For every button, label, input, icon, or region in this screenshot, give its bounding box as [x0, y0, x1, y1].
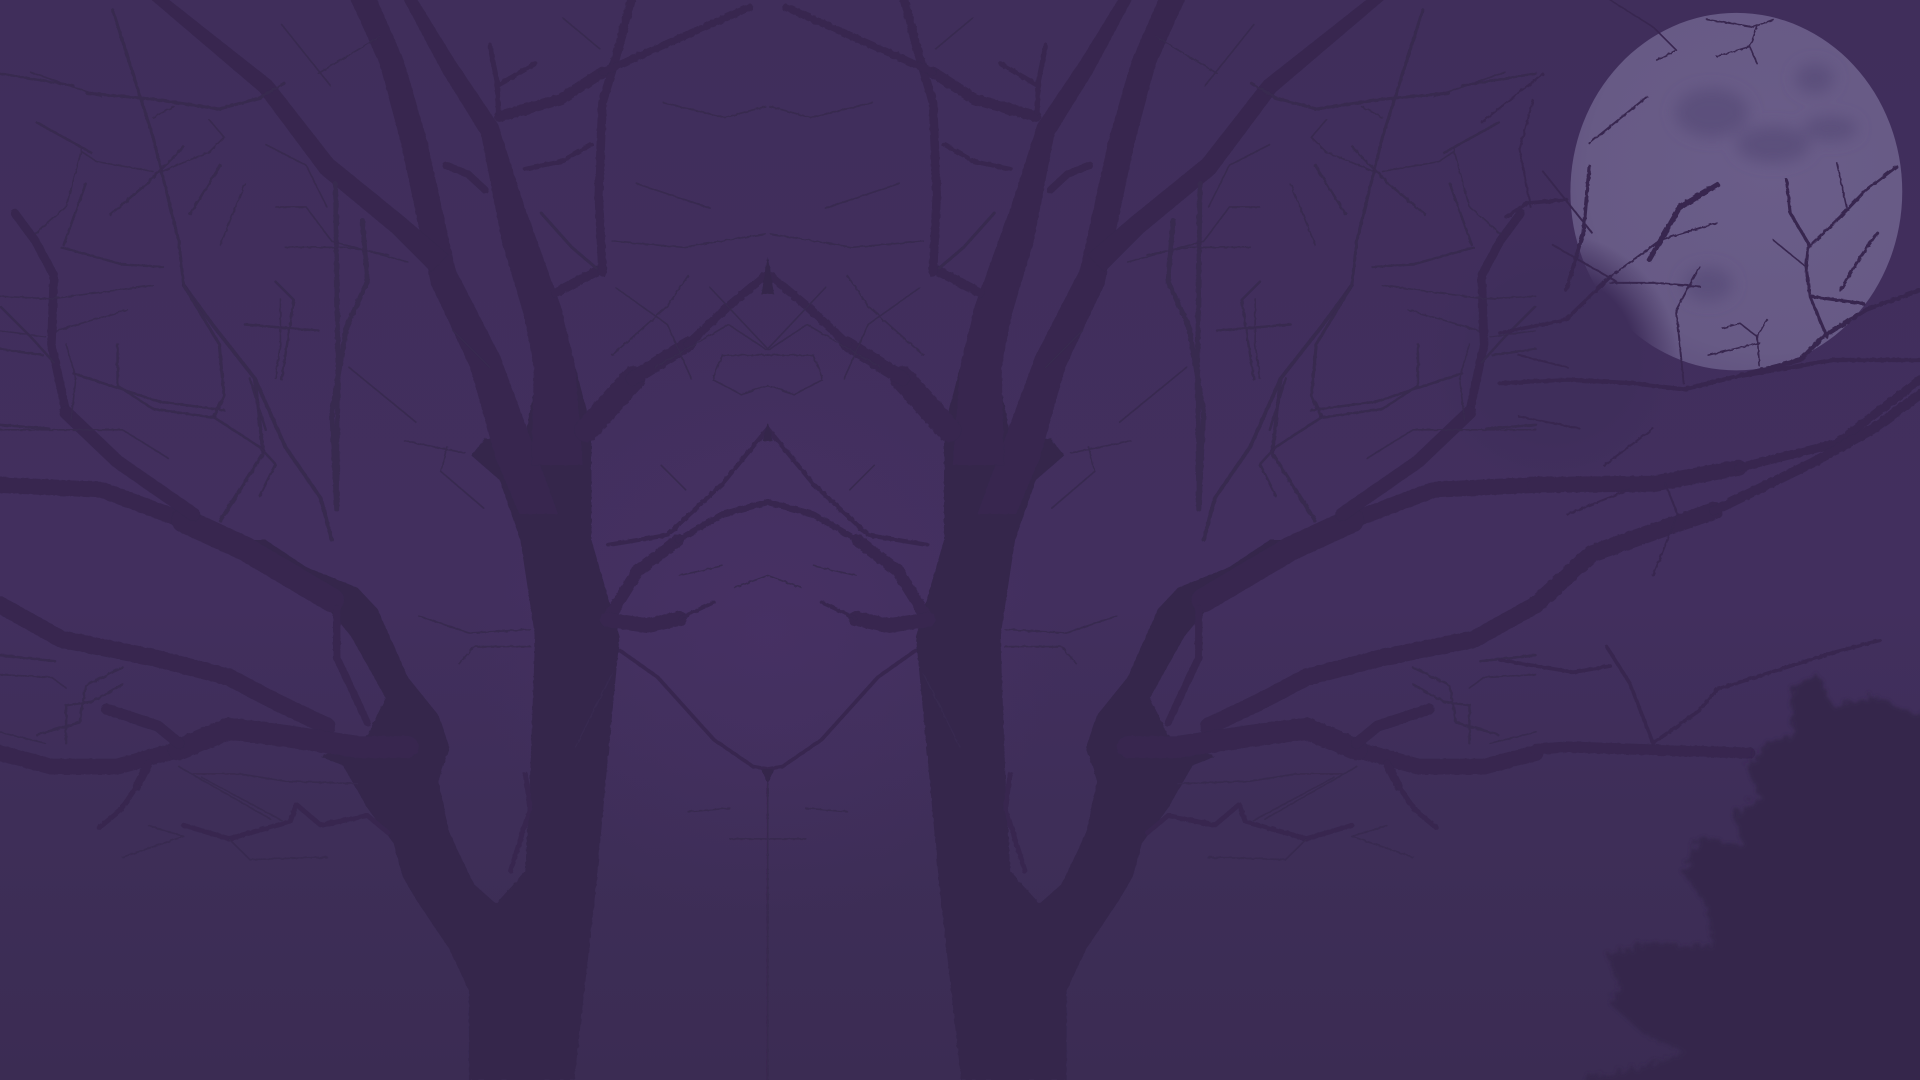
- branches crossing the moon: [1787, 167, 1897, 337]
- moon: [1428, 13, 1902, 482]
- lower limbs: [607, 540, 678, 620]
- left tree: [0, 0, 774, 1080]
- conifer tree: [1587, 673, 1920, 1080]
- major branches: [144, 0, 583, 514]
- trunk and main limb: [214, 367, 620, 1080]
- knots on central axis: [762, 257, 774, 784]
- twigs: [0, 10, 768, 1080]
- right-side branches: [1482, 0, 1920, 753]
- mirrored tree: [762, 0, 1536, 1080]
